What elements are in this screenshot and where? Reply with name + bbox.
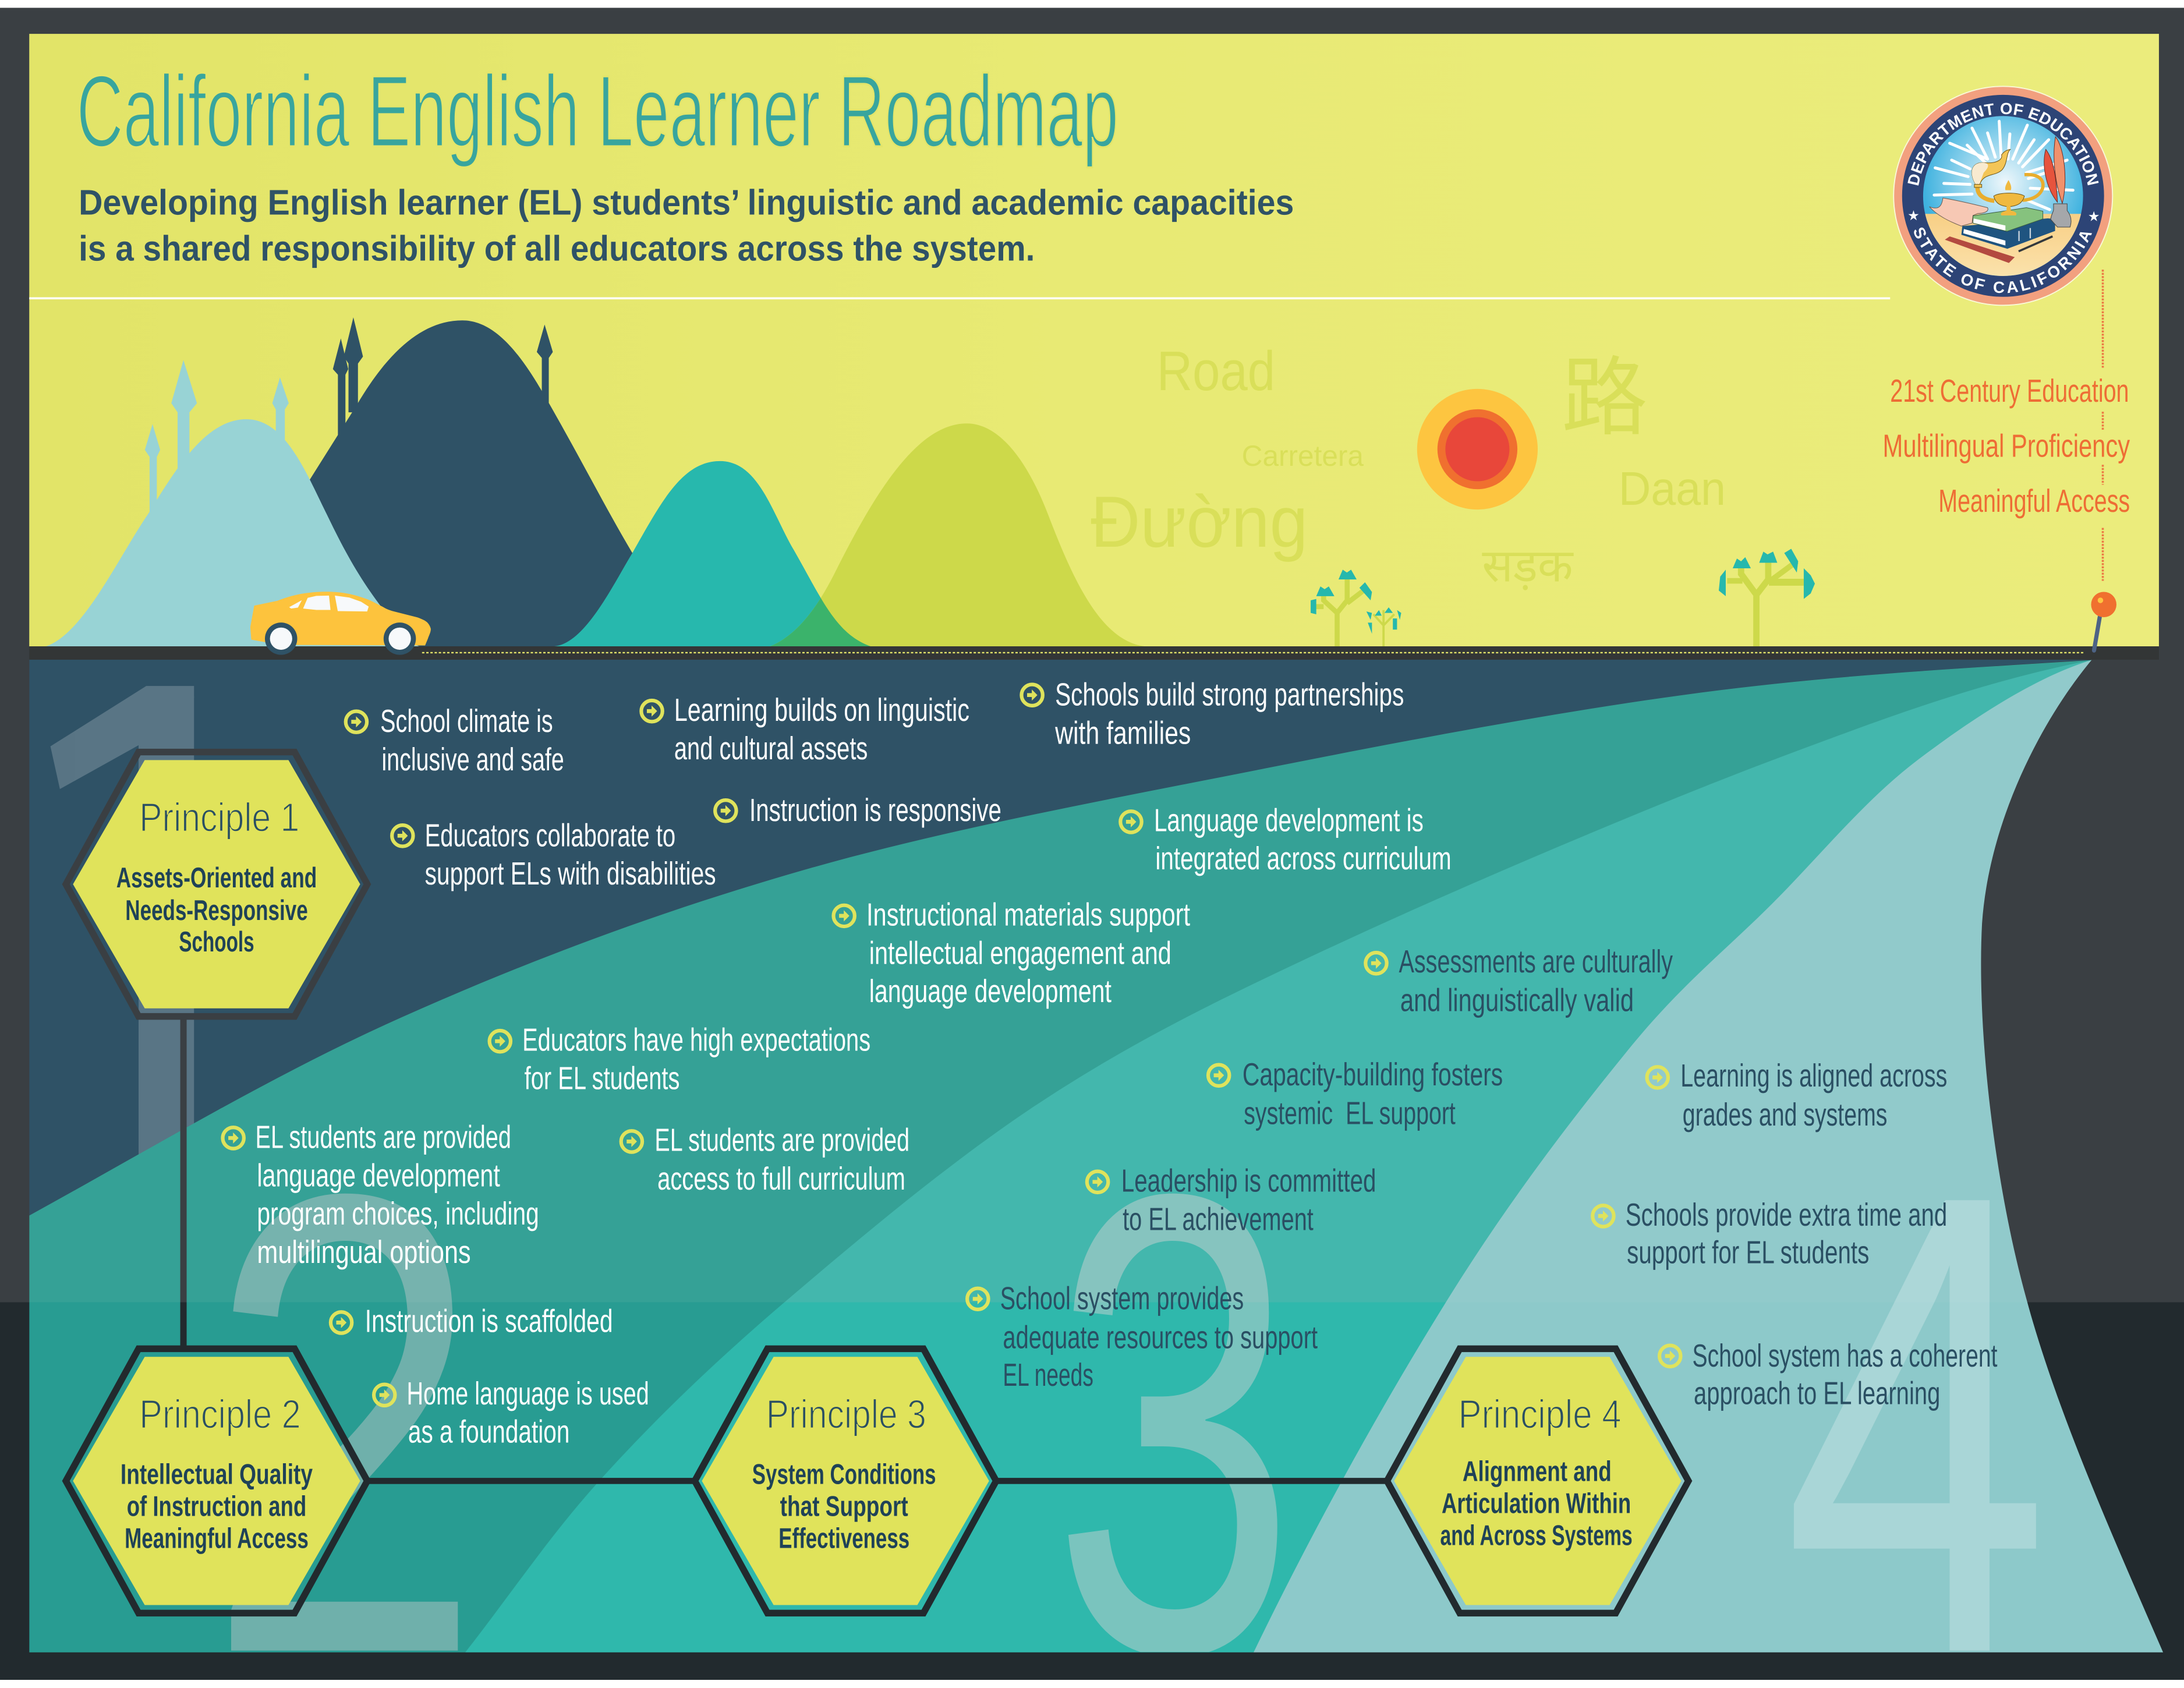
- hexagon: principle 1: Needs-Responsive: [125, 895, 308, 927]
- item: home language: Home language is used: [407, 1375, 649, 1411]
- item: high expectations: Educators have high expectations: [522, 1021, 870, 1057]
- item: resources: EL needs: [1003, 1357, 1093, 1393]
- word: lu: 路: [1562, 351, 1648, 447]
- hexagon: principle 2: Intellectual Quality: [121, 1459, 313, 1491]
- item: language development: Language development is: [1154, 802, 1424, 838]
- icon: navy towers: [333, 317, 553, 440]
- hexagon: principle 3: [695, 1349, 996, 1613]
- item: language programs: [223, 1119, 539, 1270]
- item: home language: [374, 1375, 649, 1450]
- list: principle 2 items: [223, 802, 1452, 1450]
- item: school climate: [346, 703, 564, 777]
- item: resources: [967, 1280, 1318, 1393]
- hexagon: principle 2: Meaningful Access: [125, 1523, 309, 1555]
- road centre dashes: [422, 652, 2084, 653]
- connector lines: [180, 1014, 1386, 1484]
- region: principle 4: [1254, 660, 2163, 1652]
- hexagon: principle 1: Principle 1: [139, 797, 299, 841]
- word: Carretera: Carretera: [1242, 441, 1364, 473]
- hexagon: principle 2: [66, 1349, 367, 1613]
- region: principle 1: [29, 660, 2091, 1216]
- hexagon: principle 1: Assets-Oriented and: [116, 862, 317, 894]
- item: aligned learning: Learning is aligned across: [1680, 1057, 1947, 1094]
- item: instruction responsive: Instruction is responsive: [749, 792, 1001, 828]
- hill: navy: [285, 320, 696, 646]
- red dotted pole line: [2102, 270, 2104, 581]
- word: sadak: सड़क: [1482, 540, 1574, 591]
- hexagon: principle 3: Principle 3: [766, 1393, 926, 1438]
- item: learning builds: and cultural assets: [674, 730, 868, 766]
- word: Daan: Daan: [1619, 463, 1726, 516]
- seal stars: ★: [2089, 211, 2100, 223]
- icon: car: [250, 592, 431, 655]
- road: [29, 646, 2159, 660]
- item: language programs: multilingual options: [257, 1234, 471, 1270]
- list: principle 1 items: [346, 676, 1404, 891]
- item: resources: School system provides: [1000, 1280, 1244, 1317]
- word: Duong: Đường: [1091, 483, 1308, 564]
- item: educators collaborate: support ELs with disabilities: [425, 855, 716, 891]
- hexagon: principle 1: [66, 752, 367, 1017]
- item: scaffolded: [331, 1303, 613, 1339]
- word: Road: Road: [1157, 341, 1275, 402]
- yellow sky background: [29, 34, 2159, 647]
- item: language development: integrated across curriculum: [1155, 840, 1452, 876]
- subtitle: Developing English learner (EL) students’ linguistic and academic capacities: [79, 184, 1294, 223]
- item: full curriculum: [621, 1121, 909, 1197]
- item: learning builds: [641, 692, 969, 766]
- item: instructional materials: language development: [869, 973, 1112, 1009]
- icon: tree small left: [1311, 569, 1372, 646]
- item: school climate: inclusive and safe: [381, 741, 564, 777]
- ruler: [1945, 236, 2015, 263]
- icon: tree right: [1719, 549, 1815, 646]
- item: capacity building: systemic EL support: [1244, 1095, 1456, 1131]
- item: coherent approach: approach to EL learning: [1694, 1375, 1940, 1411]
- values text block: [1883, 373, 2130, 519]
- hill: teal: [554, 461, 870, 646]
- panel: principle roads: [29, 660, 2163, 1652]
- item: scaffolded: Instruction is scaffolded: [365, 1303, 613, 1339]
- item: leadership: to EL achievement: [1123, 1201, 1314, 1237]
- pencil: [2019, 236, 2052, 252]
- scroll: [1930, 198, 1988, 226]
- item: capacity building: Capacity-building fosters: [1243, 1056, 1503, 1092]
- ink bottle: [2051, 204, 2071, 227]
- numeral 1: [50, 686, 194, 1154]
- subtitle: is a shared responsibility of all educators across the system.: [79, 230, 1035, 269]
- quills: [2044, 150, 2058, 202]
- seal text top: DEPARTMENT OF EDUCATION: [1907, 102, 2098, 186]
- item: school climate: School climate is: [380, 703, 553, 739]
- icon: map pin: [2091, 592, 2116, 650]
- item: assessments: and linguistically valid: [1400, 982, 1634, 1018]
- item: educators collaborate: Educators collaborate to: [425, 817, 675, 853]
- hill: light blue: [46, 419, 419, 646]
- item: instructional materials: intellectual engagement and: [869, 935, 1171, 971]
- seal text bottom: STATE OF CALIFORNIA: [1914, 227, 2092, 293]
- lamp body: [2023, 175, 2043, 200]
- seal stars: ★: [1908, 210, 1919, 222]
- item: high expectations: for EL students: [525, 1060, 679, 1096]
- item: aligned learning: grades and systems: [1683, 1096, 1887, 1133]
- item: language programs: program choices, including: [257, 1195, 539, 1232]
- subtitle: [79, 184, 1294, 269]
- item: extra time: [1592, 1197, 1947, 1271]
- item: resources: adequate resources to support: [1003, 1319, 1318, 1356]
- title: California English Learner Roadmap: [77, 56, 1118, 168]
- hexagon: principle 4: [1387, 1349, 1689, 1613]
- item: coherent approach: School system has a coherent: [1693, 1337, 1998, 1374]
- panel: header and landscape: [29, 34, 2159, 660]
- hexagon: principle 3: that Support: [780, 1491, 908, 1523]
- hexagon: principle 4: Articulation Within: [1442, 1488, 1631, 1520]
- item: assessments: [1365, 943, 1673, 1018]
- green book: [1973, 208, 2043, 231]
- item: partnerships: Schools build strong partnerships: [1055, 676, 1404, 713]
- item: coherent approach: [1659, 1337, 1998, 1411]
- hexagon: principle 2: of Instruction and: [127, 1491, 306, 1523]
- icon: tree tiny: [1367, 607, 1401, 646]
- item: language programs: language development: [257, 1157, 501, 1193]
- item: assessments: Assessments are culturally: [1399, 943, 1673, 979]
- item: instructional materials: Instructional materials support: [866, 896, 1191, 932]
- icon: sun: [1417, 389, 1538, 509]
- hill overlap: [770, 597, 870, 646]
- item: leadership: Leadership is committed: [1121, 1162, 1376, 1198]
- item: extra time: Schools provide extra time and: [1626, 1197, 1947, 1233]
- region: principle 3: [465, 660, 2091, 1652]
- navy book: [1962, 218, 2055, 249]
- item: aligned learning: [1647, 1057, 1947, 1133]
- item: high expectations: [490, 1021, 870, 1096]
- item: leadership: [1087, 1162, 1376, 1237]
- hexagon: principle 3: System Conditions: [752, 1459, 936, 1491]
- hexagon: principle 2: Principle 2: [139, 1393, 301, 1438]
- list: principle 4 items: [1592, 1057, 1998, 1411]
- hexagon: principle 4: Principle 4: [1459, 1393, 1622, 1438]
- hill: lime: [770, 423, 1144, 646]
- item: home language: as a foundation: [408, 1413, 569, 1450]
- item: partnerships: with families: [1054, 714, 1191, 751]
- hexagon: principle 3: Effectiveness: [778, 1523, 909, 1555]
- item: partnerships: [1021, 676, 1404, 751]
- list: principle 3 items: [967, 943, 1673, 1393]
- item: full curriculum: EL students are provided: [654, 1121, 909, 1158]
- item: language programs: EL students are provided: [255, 1119, 511, 1155]
- hexagon: principle 1: Schools: [179, 926, 254, 958]
- icon: light towers: [145, 360, 289, 518]
- item: instructional materials: [834, 896, 1191, 1009]
- item: full curriculum: access to full curriculum: [657, 1160, 905, 1197]
- hexagon: principle 4: Alignment and: [1463, 1456, 1612, 1488]
- region: principle 2: [29, 660, 2091, 1652]
- lamp flame: [1972, 150, 2010, 185]
- hexagon: principle 4: and Across Systems: [1440, 1520, 1633, 1552]
- white divider: [29, 297, 1890, 299]
- item: learning builds: Learning builds on linguistic: [674, 692, 969, 728]
- item: educators collaborate: [392, 817, 716, 891]
- icon: state seal: [1893, 86, 2114, 306]
- seal stars: [1908, 210, 2100, 223]
- item: language development: [1120, 802, 1452, 876]
- item: extra time: support for EL students: [1627, 1234, 1869, 1271]
- item: capacity building: [1208, 1056, 1503, 1131]
- item: instruction responsive: [715, 792, 1001, 828]
